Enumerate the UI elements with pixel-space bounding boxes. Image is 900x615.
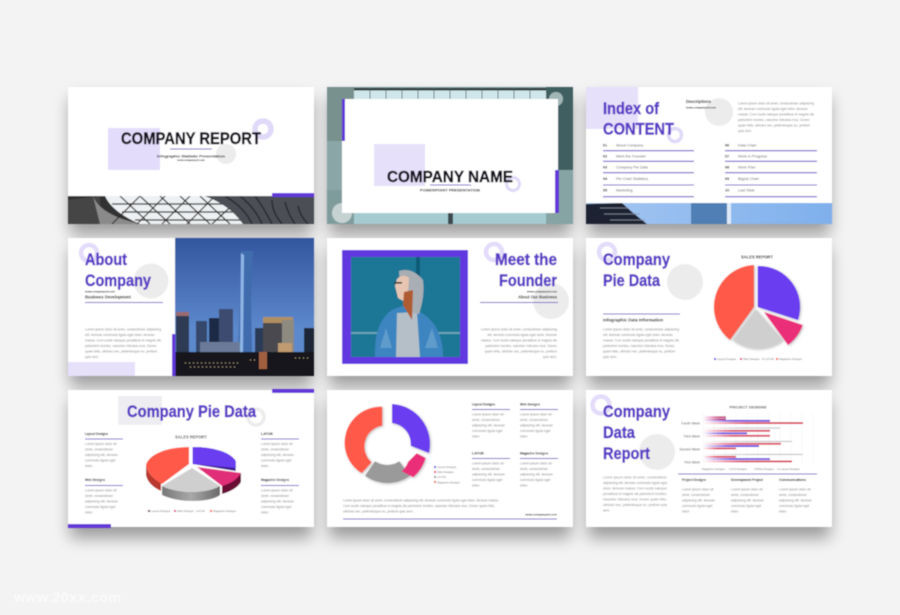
body text: massa. Cum sociis natoque penatibus et magnis dis (481, 338, 557, 342)
column: communications: adipiscing elit. Aenean (779, 498, 812, 502)
column: project designs: commodo ligula eget (682, 504, 713, 508)
descriptions text: parturient montes, nascetur ridiculus mus. Donec (738, 118, 810, 122)
contents list right: Work in Progress (738, 154, 767, 158)
body text: massa. Cum sociis natoque penatibus et magnis dis (85, 338, 161, 342)
contents list left: Marketing (616, 188, 633, 192)
body text: quis sem. (85, 355, 99, 359)
subheading: www.companyurl.com (526, 290, 557, 294)
body text: ultricies nec, pellentesque eu, pretium quis (603, 503, 667, 507)
feature: layout designs: dolor. (472, 434, 480, 438)
left feature text: amet, consectetuer (85, 448, 114, 452)
chart legend (434, 465, 461, 484)
feature: web designs: amet, consectetuer (520, 418, 549, 422)
bar chart: PROJECT DESIGNS (730, 404, 767, 410)
descriptions text: Lorem ipsum dolor sit amet, consectetuer adipiscing (738, 102, 814, 106)
index photo: skyline (586, 203, 832, 224)
column: development project (731, 478, 764, 514)
feature: magazine designs: Magazine Designs (520, 452, 548, 456)
heading: Company Pie Data (127, 403, 257, 421)
contents list left: Meet the Founder (616, 154, 647, 158)
chart legend: Web Designs (743, 357, 760, 361)
contents list left: 02 (603, 154, 607, 158)
column: development project: commodo ligula eget (731, 504, 762, 508)
chart legend: Web Designs (177, 509, 194, 513)
feature: layuk: LAYUK (472, 452, 484, 456)
right feature text: LAYUK (261, 432, 273, 436)
bar chart: First Week (684, 460, 700, 464)
feature: layuk: adipiscing elit. Aenean (472, 472, 505, 476)
left feature text: dolor. (85, 510, 93, 514)
contents list left: Pie Chart Statistics (616, 177, 648, 181)
right feature text: commodo ligula eget (261, 505, 292, 509)
index heading: Index of (603, 100, 659, 118)
photo: city skyline at dusk (175, 238, 314, 376)
left feature text: amet, consectetuer (85, 494, 114, 498)
body text: elit. Aenean commodo ligula eget dolor. Aenean (85, 333, 155, 337)
body text: parturient montes, nascetur ridiculus mus. Donec (485, 344, 557, 348)
feature: magazine designs (520, 452, 558, 488)
body text: penatibus et magnis dis parturient montes, (603, 492, 667, 496)
left feature text: adipiscing elit. Aenean (85, 453, 118, 457)
body text: Lorem ipsum dolor sit amet, consectetuer adipiscing (85, 328, 161, 332)
descriptions text: quam felis, ultricies nec, pellentesque eu, pretium (738, 124, 810, 128)
slide: about company (68, 238, 314, 376)
column: project designs: adipiscing elit. Aenean (682, 498, 715, 502)
contents list left: 01 (603, 144, 607, 148)
left feature text: Web Designs (85, 478, 105, 482)
column: development project: adipiscing elit. Aenean (731, 498, 764, 502)
cover title: COMPANY REPORT (121, 130, 261, 148)
cover subtitle: POWERPOINT PRESENTATION (420, 188, 480, 192)
body text: Cum sociis natoque penatibus et magnis dis parturient montes, nascetur ridiculus mus. Donec quam felis, (343, 504, 495, 508)
chart legend: LAYUK (765, 357, 774, 361)
chart legend: Layout Designs (151, 509, 171, 513)
left feature text: adipiscing elit. Aenean (85, 500, 118, 504)
slide: company data report: Report (603, 445, 650, 463)
contents list right: 08 (725, 166, 729, 170)
slide: company report cover: www.companyurl.com (177, 158, 205, 162)
body text: quam felis, ultricies nec, pellentesque eu, pretium (85, 350, 157, 354)
descriptions text: elit. Aenean commodo ligula eget dolor. Aenean (738, 107, 808, 111)
contents list left: Company Pie Data (616, 166, 649, 170)
feature: web designs: Web Designs (520, 402, 540, 406)
slide: company report cover (68, 87, 314, 224)
slide: company pie data 3D (68, 389, 314, 528)
feature: web designs: adipiscing elit. Aenean (520, 424, 553, 428)
contents list right: Last Slide (738, 188, 755, 192)
slide: about company: Company (85, 272, 152, 290)
body text: sem. (603, 508, 610, 512)
chart legend: Magazine Designs (437, 480, 461, 484)
left feature text (85, 432, 123, 514)
right feature text: dolor. (261, 510, 269, 514)
body text: Lorem ipsum dolor sit amet, consectetuer adipiscing elit. Aenean commodo ligula eget dolor. Aenean massa. (343, 498, 499, 502)
feature: layout designs: Layout Designs (472, 402, 495, 406)
feature: layout designs (472, 402, 510, 438)
body text (343, 498, 499, 514)
body text: ultricies nec, pellentesque eu, pretium quis sem. (343, 510, 413, 514)
column: development project: Lorem ipsum dolor sit (731, 488, 763, 492)
contents list left: 03 (603, 166, 607, 170)
feature: magazine designs: commodo ligula eget (520, 478, 551, 482)
heading: Company (603, 403, 671, 421)
body text: dolor. Aenean massa. Cum sociis natoque (603, 486, 667, 490)
chart legend: Ui Layout Designs (777, 467, 800, 471)
subheading: www.companyurl.com (84, 290, 115, 294)
body text (481, 328, 557, 359)
body text: Lorem ipsum dolor sit amet, consectetuer adipiscing (481, 328, 557, 332)
body text: massa. Cum sociis natoque penatibus et magnis dis (603, 338, 679, 342)
chart legend: LAYUK (196, 509, 205, 513)
body text: parturient montes, nascetur ridiculus mus. Donec (85, 344, 157, 348)
feature: layout designs: commodo ligula eget (472, 429, 503, 433)
chart legend (714, 357, 803, 361)
chart legend: Layout Designs (437, 465, 457, 469)
photo: founder in hood and denim jacket (351, 257, 460, 357)
contents list left: About Company (616, 144, 643, 148)
chart legend: Layout Designs (717, 357, 737, 361)
chart legend: Ui/Web Designs (754, 467, 775, 471)
heading: About (85, 251, 127, 269)
slide: index of content (586, 87, 832, 224)
chart legend: Ux/UI Designs (729, 467, 747, 471)
right feature text (261, 432, 299, 514)
column: development project: dolor. (731, 510, 739, 514)
feature: layuk: amet, consectetuer (472, 467, 501, 471)
chart legend: LAYUK (437, 475, 446, 479)
right feature text: Lorem ipsum dolor sit (261, 442, 293, 446)
column: communications: commodo ligula eget (779, 504, 810, 508)
chart legend: Magazine Designs (213, 509, 237, 513)
body text: parturient montes, nascetur ridiculus mus. Donec (603, 344, 675, 348)
slide: company data report (586, 390, 832, 527)
slide: index of content: www.companyurl.com (685, 106, 716, 110)
right feature text: adipiscing elit. Aenean (261, 500, 294, 504)
cover subtitle: Infographic Statistic Presentation (157, 154, 226, 158)
body text (85, 328, 161, 359)
descriptions text (738, 102, 814, 133)
slide: company name cover (327, 87, 573, 224)
chart title: SALES REPORT (741, 254, 773, 260)
column: project designs (682, 478, 715, 514)
donut chart (345, 404, 430, 483)
feature: layuk (472, 452, 510, 488)
column: communications (779, 478, 812, 514)
chart legend: Magazine Designs (779, 357, 803, 361)
heading: Meet the (495, 251, 557, 269)
left feature text: Lorem ipsum dolor sit (85, 442, 117, 446)
contents list right (725, 144, 817, 197)
left feature text: commodo ligula eget (85, 458, 116, 462)
cover title: COMPANY NAME (387, 169, 513, 186)
feature: layout designs: adipiscing elit. Aenean (472, 424, 505, 428)
contents list right: Bigest Chart (738, 177, 760, 181)
body text (603, 328, 679, 359)
feature: magazine designs: amet, consectetuer (520, 467, 549, 471)
body text: adipiscing elit. Aenean commodo ligula eget (603, 481, 667, 485)
body text: elit. Aenean commodo ligula eget dolor. Aenean (487, 333, 557, 337)
watermark: www.20xx.com (13, 589, 121, 605)
slide: index of content: CONTENT (603, 120, 674, 138)
column: communications: Communications (779, 478, 806, 482)
slide: donut chart (327, 390, 573, 527)
column: development project: amet, consectetuer (731, 493, 760, 497)
right feature text: Magazine Designs (261, 478, 289, 482)
column: project designs: Project Designs (682, 478, 706, 482)
feature: layuk: dolor. (472, 484, 480, 488)
column: project designs: Lorem ipsum dolor sit (682, 488, 714, 492)
column: communications: Lorem ipsum dolor sit (779, 488, 811, 492)
slide shadows (70, 98, 830, 538)
left feature text: dolor. (85, 464, 93, 468)
right feature text: commodo ligula eget (261, 458, 292, 462)
feature: web designs: Lorem ipsum dolor sit (520, 412, 552, 416)
column: project designs: amet, consectetuer (682, 493, 711, 497)
contents list right: Work Plan (738, 166, 755, 170)
feature: layout designs: amet, consectetuer (472, 418, 501, 422)
body text: quis sem. (543, 355, 557, 359)
slide: meet the founder (327, 238, 573, 376)
body text: Lorem ipsum dolor sit amet, consectetuer (603, 476, 668, 480)
contents list left (603, 144, 694, 197)
contents list right: Data Chart (738, 144, 757, 148)
heading: Company (603, 251, 671, 269)
slide: meet the founder: Founder (499, 272, 558, 290)
contents list right: 07 (725, 154, 729, 158)
feature: magazine designs: adipiscing elit. Aenean (520, 472, 553, 476)
chart legend: Web Designs (437, 470, 454, 474)
descriptions text: massa. Cum sociis natoque penatibus et magnis dis (738, 112, 814, 116)
slide: about company: Business Development (85, 294, 132, 300)
descriptions label: Descriptions (686, 99, 712, 104)
bar chart: Fourth Week (681, 422, 700, 426)
right feature text: amet, consectetuer (261, 494, 290, 498)
chart legend (702, 467, 800, 471)
feature: web designs (520, 402, 558, 438)
body text (603, 476, 668, 512)
3D pie chart (146, 447, 241, 501)
column: communications: dolor. (779, 510, 787, 514)
cover photo: steel lattice roof (68, 196, 314, 224)
slide: company pie data: Pie Data (603, 272, 661, 290)
body text: Lorem ipsum dolor sit amet, consectetuer adipiscing (603, 328, 679, 332)
descriptions text: quis sem. (738, 129, 752, 133)
slide: company data report: Data (603, 424, 636, 442)
slide: company pie data (586, 238, 832, 376)
right feature text: dolor. (261, 464, 269, 468)
feature: magazine designs: Lorem ipsum dolor sit (520, 462, 552, 466)
feature: web designs: dolor. (520, 434, 528, 438)
feature: web designs: commodo ligula eget (520, 429, 551, 433)
left feature text: commodo ligula eget (85, 505, 116, 509)
feature: layout designs: Lorem ipsum dolor sit (472, 412, 504, 416)
column: communications: amet, consectetuer (779, 493, 808, 497)
bar chart: Second Week (680, 448, 700, 452)
contents list left: 04 (603, 177, 608, 181)
url: www.companyurl.com (524, 512, 557, 516)
chart legend: Magazine Designs (702, 467, 726, 471)
body text: quam felis, ultricies nec, pellentesque eu, pretium (485, 350, 557, 354)
slide: meet the founder: About Our Business (518, 294, 558, 300)
body text: elit. Aenean commodo ligula eget dolor. Aenean (603, 333, 673, 337)
right feature text: adipiscing elit. Aenean (261, 453, 294, 457)
body text: quam felis, ultricies nec, pellentesque eu, pretium (603, 350, 675, 354)
column: development project: Development Project (731, 478, 764, 482)
chart title: SALES REPORT (175, 434, 207, 440)
body text: quis sem. (603, 355, 617, 359)
bar chart (680, 404, 813, 464)
contents list right: 10 (725, 188, 729, 192)
photo frame (342, 250, 468, 364)
contents list right: 09 (725, 177, 729, 181)
chart legend (148, 509, 237, 513)
subheading: Infographic Data Information (603, 318, 663, 322)
contents list right: 06 (725, 144, 729, 148)
right feature text: Lorem ipsum dolor sit (261, 488, 293, 492)
feature: layuk: commodo ligula eget (472, 478, 503, 482)
contents list left: 05 (603, 188, 607, 192)
feature: layuk: Lorem ipsum dolor sit (472, 462, 504, 466)
bar chart: Third Week (683, 434, 700, 438)
right feature text: amet, consectetuer (261, 448, 290, 452)
body text: nascetur ridiculus mus. Donec quam felis, (603, 498, 667, 502)
pie chart (714, 265, 803, 349)
feature: magazine designs: dolor. (520, 484, 528, 488)
left feature text: Lorem ipsum dolor sit (85, 488, 117, 492)
left feature text: Layout Designs (85, 432, 108, 436)
column: project designs: dolor. (682, 510, 690, 514)
